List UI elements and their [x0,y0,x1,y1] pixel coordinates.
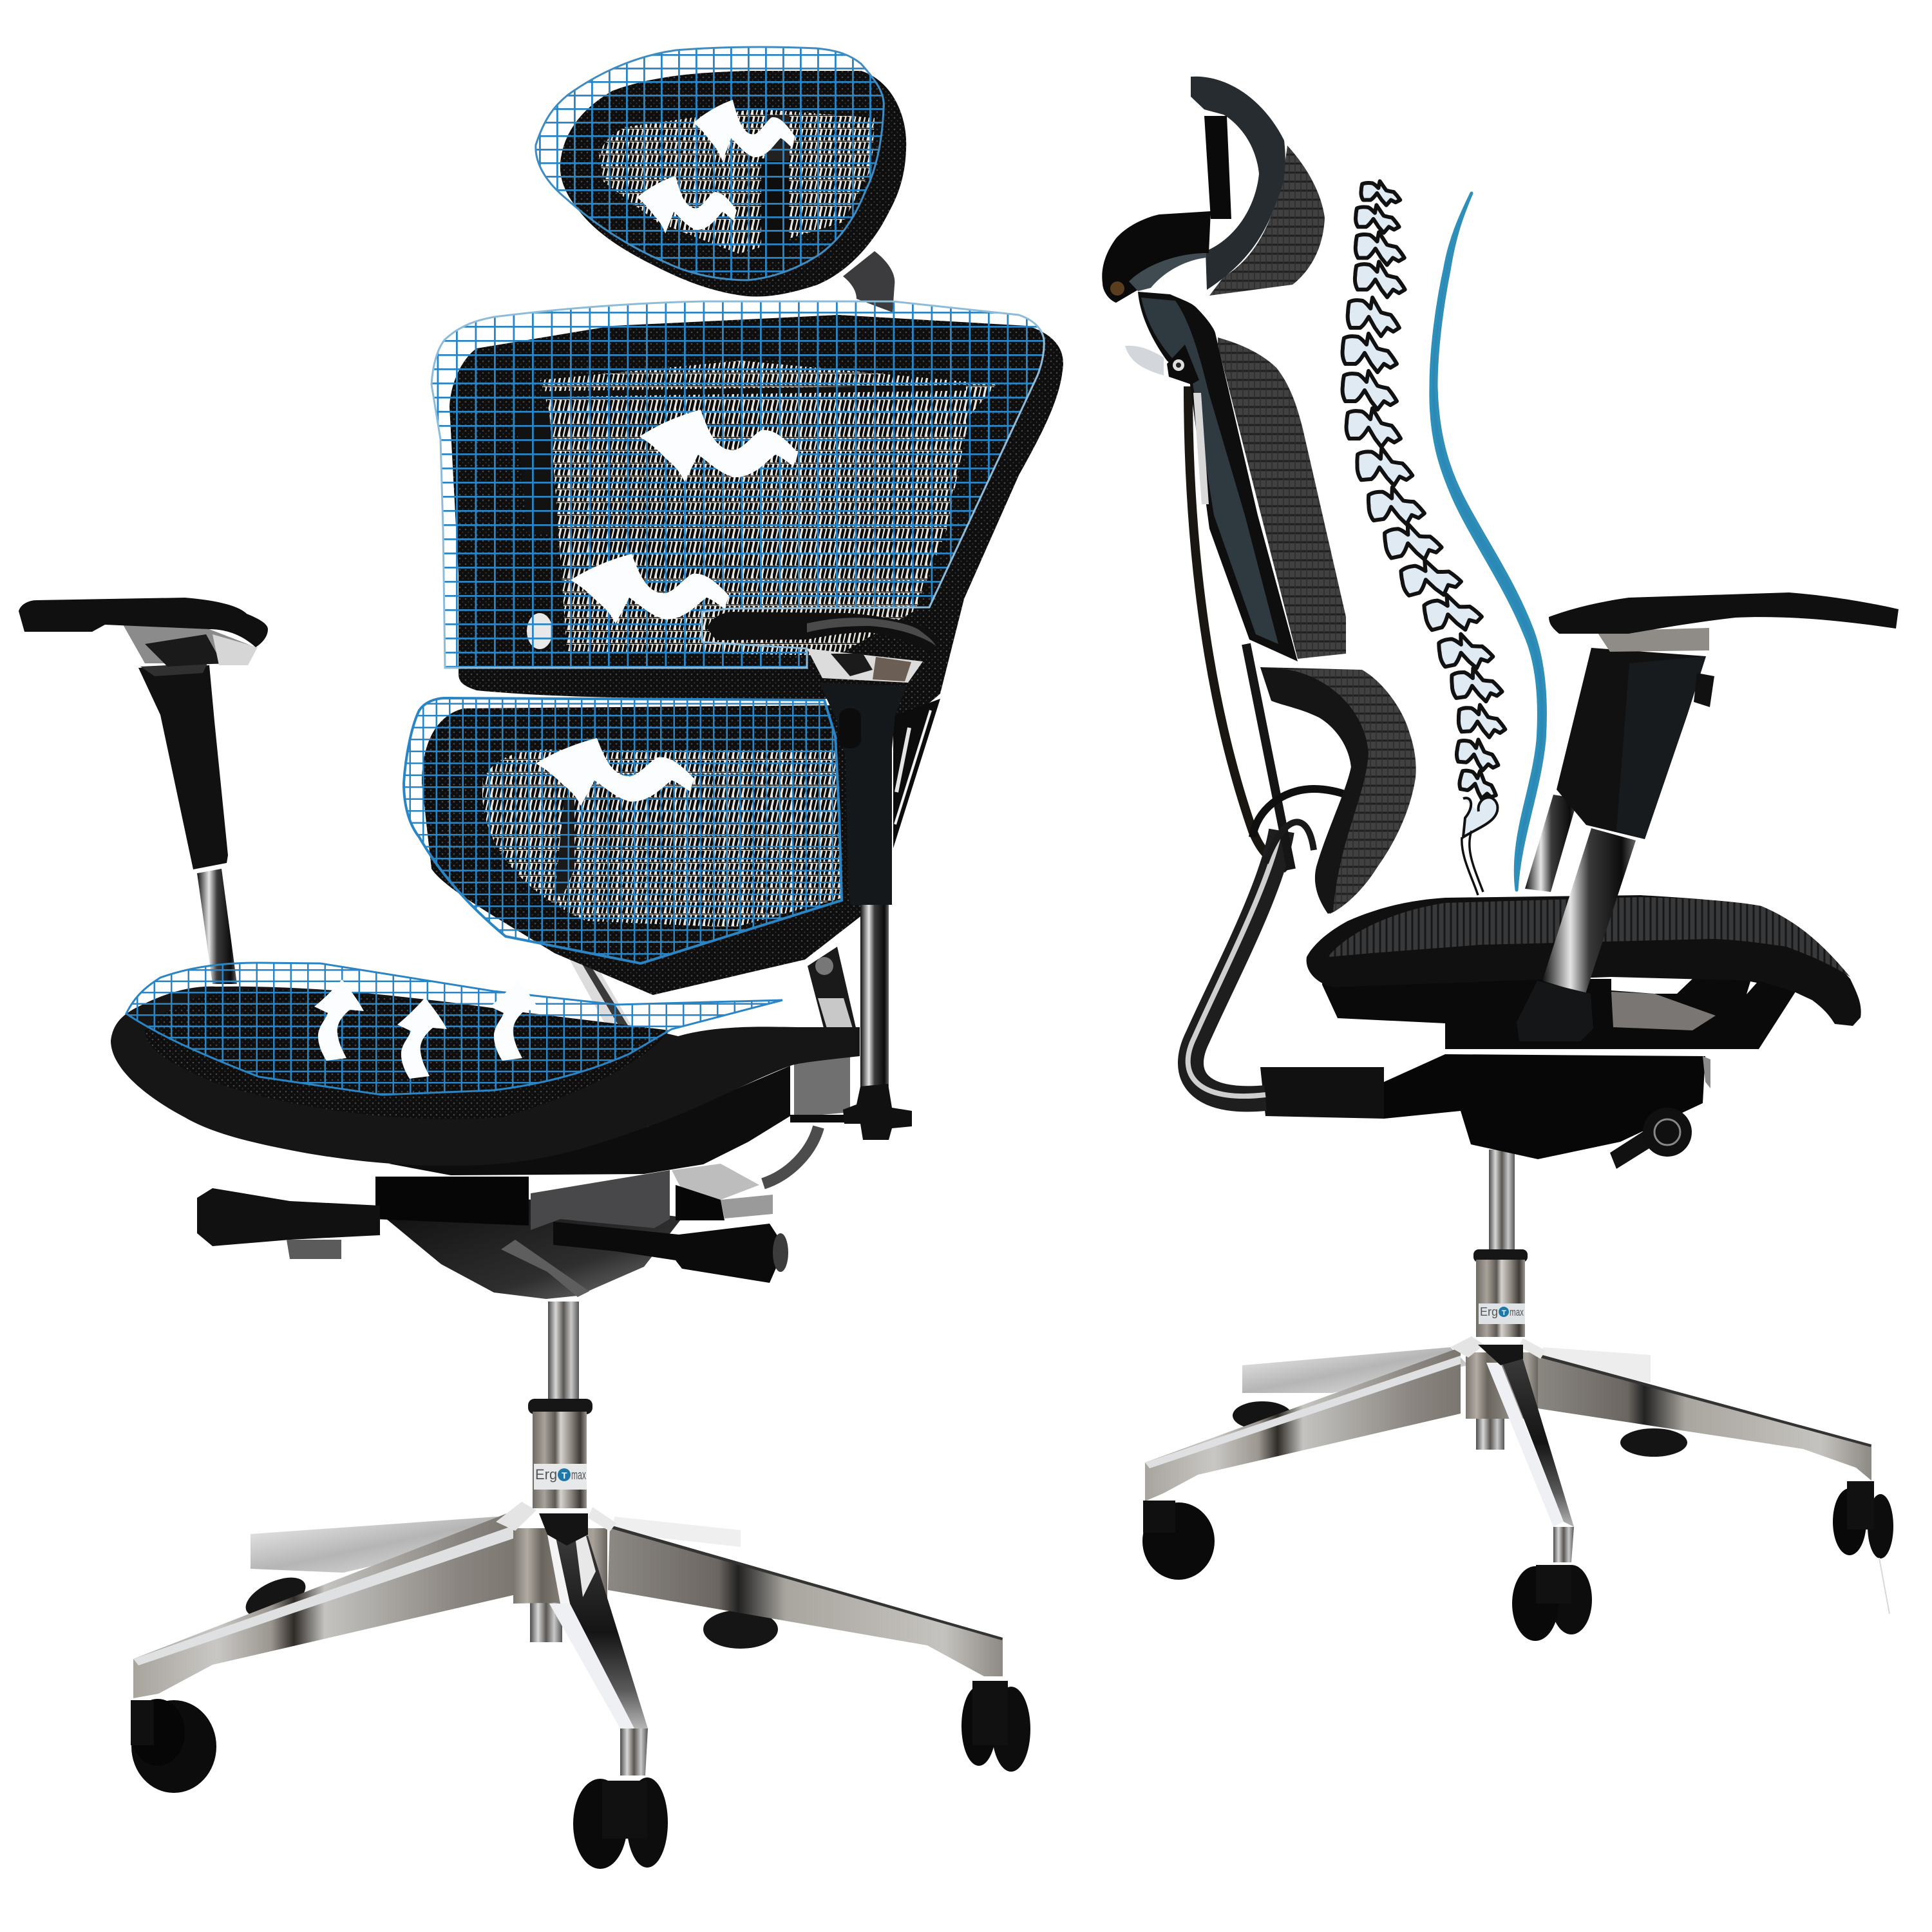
side chair: armrest column [1557,648,1714,839]
front chair: lumbar support [422,705,863,995]
front chair: backrest [450,315,1063,718]
front chair: tilt mechanism and levers [197,1056,866,1283]
side chair: backrest mesh [1218,337,1346,659]
front chair: tilt cone [382,1198,683,1299]
left armrest column and rod [138,663,237,984]
spine curve line [1431,193,1545,890]
side chair: headrest mesh [1209,146,1325,296]
front chair [19,47,1063,1869]
right armrest rod and base [843,886,912,1140]
side label suffix: max [1510,1306,1524,1318]
heat arrows: headrest [637,100,795,234]
side chair: backrest frame [1138,292,1298,661]
front chair: gas cylinder and label [528,1302,592,1508]
right armrest pad and chrome bracket [707,612,938,683]
front chair: headrest [560,71,906,296]
side chair: seat [1307,895,1861,1026]
blue grid overlay: backrest [431,301,1044,668]
side cylinder brand label: Erg [1480,1305,1498,1318]
side chair: seat underframe [1322,978,1797,1049]
front chair: five-star chrome base [133,1502,1003,1776]
side chair: tilt mechanism and knob [1384,1054,1710,1169]
front chair: backrest-to-seat chrome link [567,947,857,1030]
side chair: armrest tube base [1517,981,1593,1041]
front chair: casters [131,1681,1030,1869]
heat arrows: backrest [571,410,798,624]
side chair: five-star chrome base [1145,1336,1871,1562]
label logo letter: T [562,1470,567,1481]
side chair: rear casters [1233,1401,1687,1457]
front chair: seat [111,987,860,1166]
side chair: gas cylinder and label [1473,1150,1528,1337]
side chair: main armrest tube [1542,828,1636,994]
side chair: casters [1142,1481,1893,1641]
label suffix: max [571,1468,586,1482]
side chair: back pivot and chrome [1125,345,1199,384]
heat arrows: seat [314,980,540,1079]
side label logo letter: T [1502,1309,1506,1317]
side chair: rear armrest tube [1525,795,1578,892]
side chair [1102,77,1899,1641]
left armrest pad and bracket [19,598,268,667]
right armrest column [819,683,907,905]
front chair: rear casters [240,1569,778,1649]
side chair: armrest pad [1549,592,1899,652]
spine illustration [1342,181,1506,895]
heat arrow: lumbar [536,738,694,806]
side chair: back tubular frame [1188,386,1346,1099]
cylinder brand label: Erg [535,1466,557,1482]
side chair: headrest frame [1102,77,1285,303]
blue grid overlay: headrest [536,47,884,280]
side chair: connector [1260,1067,1384,1119]
blue grid overlay: seat [126,963,782,1095]
side chair: lumbar [1260,667,1416,914]
stray scratch line [1879,1558,1889,1614]
front chair: rear frame strut [893,699,940,848]
blue grid overlay: lumbar [404,698,842,963]
front chair: headrest neck [843,251,895,312]
